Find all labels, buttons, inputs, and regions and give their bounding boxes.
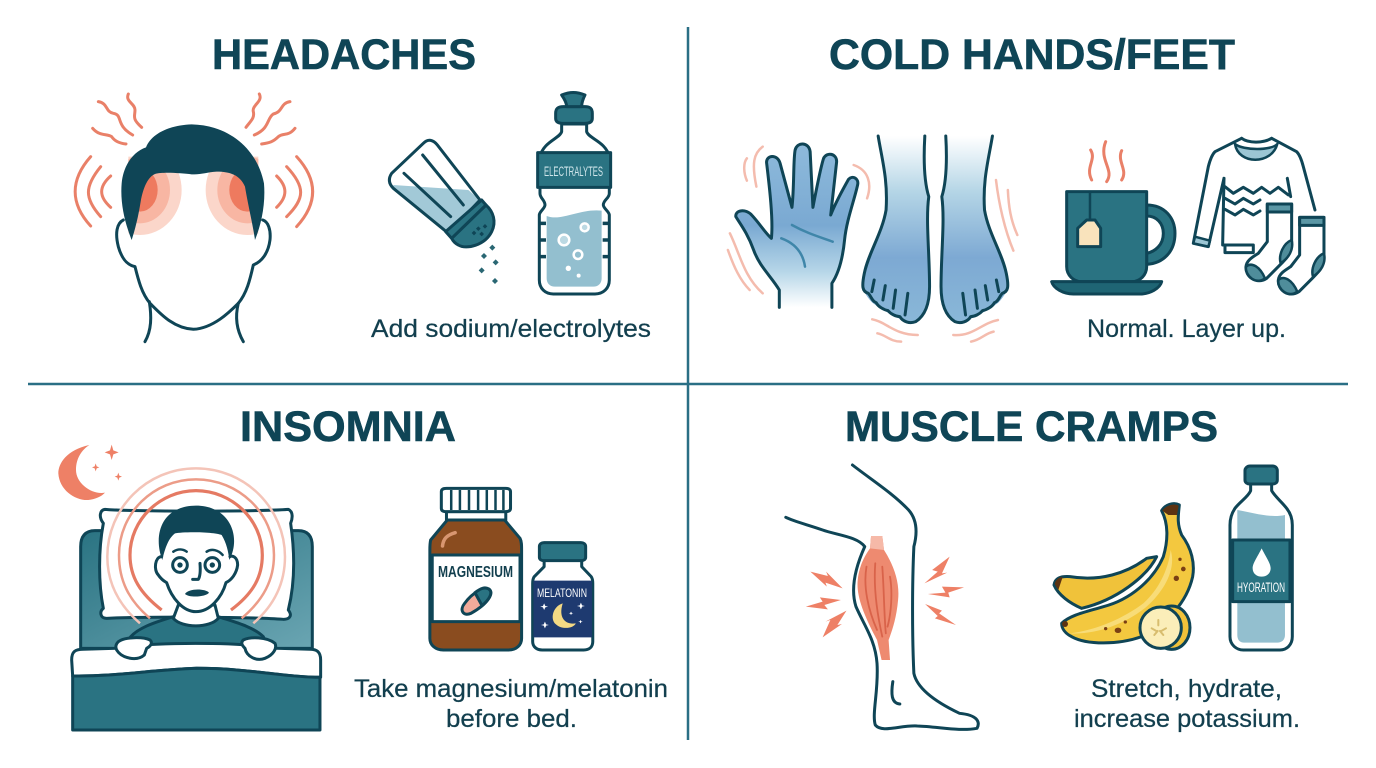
icon: magnesium bottle [430, 488, 522, 650]
icon: melatonin bottle: MELATONIN [537, 586, 587, 600]
icon: hydration bottle: HYORATION [1237, 580, 1285, 595]
panel: cold hands/feet [728, 32, 1325, 343]
icon: head with pain [75, 94, 313, 342]
divider: horizontal [28, 383, 1348, 385]
icon: hydration bottle [1230, 466, 1292, 650]
caption: insomnia [354, 675, 668, 733]
icon: bananas [1054, 504, 1193, 649]
caption: muscle cramps: increase potassium. [1074, 705, 1300, 733]
blanket [72, 643, 321, 677]
caption: insomnia: Take magnesium/melatonin [354, 675, 668, 703]
icon: cold hand [728, 144, 869, 307]
divider: vertical [687, 27, 689, 740]
icon: mug of tea [1052, 142, 1175, 294]
icon: awake person in bed [58, 445, 321, 730]
heading: muscle cramps: MUSCLE CRAMPS [845, 404, 1218, 451]
caption: cold hands/feet: Normal. Layer up. [1087, 315, 1286, 343]
icon: leg with cramp [786, 465, 978, 729]
panel: muscle cramps [786, 404, 1300, 733]
caption: headaches: Add sodium/electrolytes [371, 315, 651, 343]
icon: salt shaker [389, 140, 499, 284]
heading: cold hands/feet: COLD HANDS/FEET [829, 32, 1235, 79]
hair [121, 124, 264, 240]
heading: headaches: HEADACHES [212, 32, 476, 79]
caption: muscle cramps [1074, 675, 1300, 733]
panel: insomnia [58, 404, 668, 733]
icon: cold feet [863, 136, 1017, 342]
heading: insomnia: INSOMNIA [240, 404, 456, 451]
icon: magnesium bottle: MAGNESIUM [438, 564, 513, 581]
icon: electrolyte bottle [538, 92, 611, 294]
moon and stars [58, 445, 122, 500]
icon: melatonin bottle [533, 543, 593, 650]
icon: sweater and socks [1193, 138, 1325, 294]
caption: muscle cramps: Stretch, hydrate, [1091, 675, 1282, 703]
icon: electrolyte bottle: ELECTRALYTES [544, 164, 603, 179]
caption: insomnia: before bed. [446, 705, 577, 733]
panel: headaches [75, 32, 651, 343]
